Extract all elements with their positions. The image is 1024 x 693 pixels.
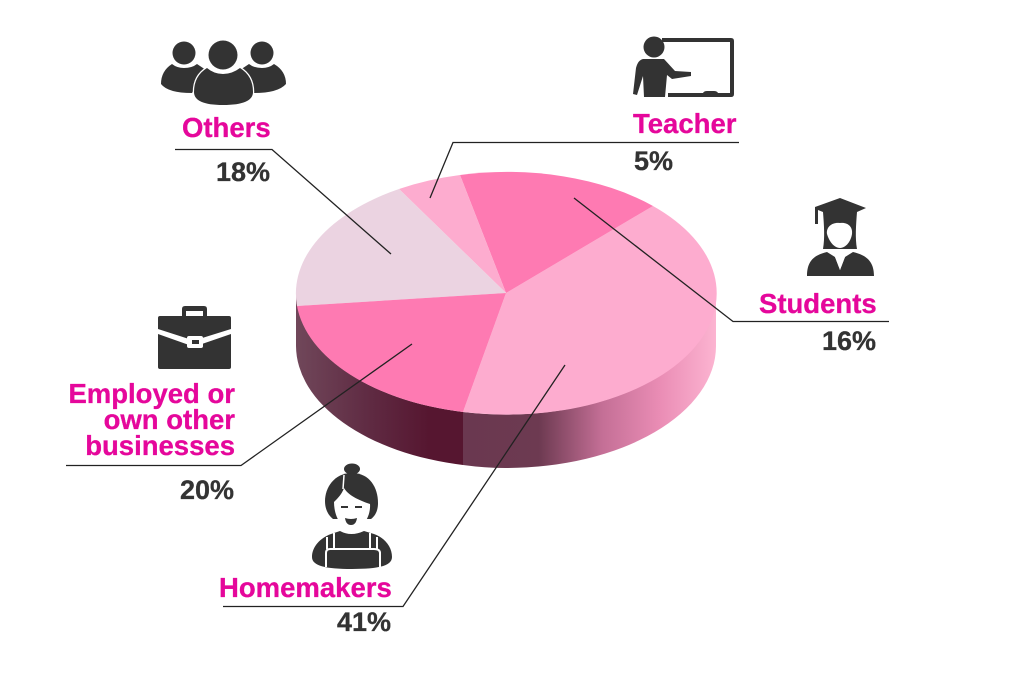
leader line: students: [574, 198, 889, 322]
value: students: 16%: [822, 326, 876, 356]
value: teacher: 5%: [634, 146, 673, 176]
icon: teacher at board: [633, 36, 734, 97]
pie chart: [296, 172, 717, 468]
label: employed: businesses: [85, 430, 235, 461]
leader line: homemakers: [223, 365, 565, 606]
value: homemakers: 41%: [337, 607, 391, 637]
icon: graduate student: [807, 198, 874, 276]
leader line: teacher: [430, 142, 739, 198]
icon: homemaker: [312, 464, 392, 569]
pie side: left dark: [296, 293, 463, 465]
icon: others group: [161, 40, 286, 105]
label: employed: Employed or: [68, 378, 235, 409]
pie side: right gradient: [463, 293, 716, 468]
label: students: Students: [759, 288, 877, 319]
leader line: others: [175, 150, 391, 254]
icon: briefcase: [158, 306, 231, 369]
value: others: 18%: [216, 157, 270, 187]
label: teacher: Teacher: [633, 108, 737, 139]
slice: homemakers: [463, 206, 717, 415]
slice: others: [296, 189, 506, 306]
label: others: Others: [182, 112, 271, 143]
slice: employed: [297, 293, 506, 412]
leader line: employed: [66, 344, 412, 466]
label: employed: own other: [104, 404, 235, 435]
slice: teacher: [399, 175, 506, 293]
value: employed: 20%: [180, 475, 234, 505]
slice: students: [460, 172, 653, 293]
label: homemakers: Homemakers: [219, 572, 392, 603]
